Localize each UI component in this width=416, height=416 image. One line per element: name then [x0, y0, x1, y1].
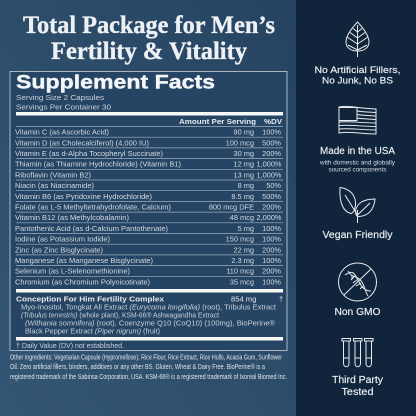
icon: test tubes [342, 338, 373, 367]
nutrient rows: Niacin (as Niacinamide) [15, 181, 94, 190]
table heading: Supplement Facts [16, 72, 215, 94]
nutrient rows: 200% [262, 267, 281, 276]
text: made in the usa: with domestic and globally [319, 160, 396, 166]
nutrient rows [15, 128, 282, 286]
icon: vegan plant [340, 188, 375, 223]
fertility complex ingredients: Myo-Inositol, Tongkat Ali Extract (Eurycoma longifolia) (root), Tribulus Extract [21, 302, 276, 312]
nutrient rows: 200% [262, 245, 281, 254]
fertility complex ingredients: Black Pepper Extract (Piper nigrum) (fruit) [25, 326, 160, 336]
nutrient rows: 100% [262, 128, 281, 137]
fertility complex heading: † [279, 294, 283, 304]
nutrient rows: 2,000% [256, 213, 282, 222]
title: Fertility & Vitality [51, 38, 247, 65]
nutrient rows: 22 mg [233, 245, 254, 254]
serving information: Servings Per Container 30 [16, 102, 111, 112]
nutrient rows: 500% [262, 138, 281, 147]
nutrient rows: 30 mg [233, 149, 254, 158]
nutrient rows: 100 mcg [226, 138, 254, 147]
nutrient rows: 8 mg [238, 181, 254, 190]
nutrient rows: Vitamin C (as Ascorbic Acid) [15, 128, 109, 137]
icon: non gmo dna [338, 263, 376, 301]
nutrient rows: Iodine (as Potassium Iodide) [15, 235, 110, 244]
bottom heavy rule [16, 337, 283, 340]
nutrient rows: 500% [262, 192, 281, 201]
title: Total Package for Men’s [23, 12, 275, 39]
nutrient rows: 5 mg [238, 224, 254, 233]
other ingredients text [10, 352, 287, 381]
top heavy rule [16, 112, 283, 116]
column headers: %DV [264, 117, 283, 126]
title [23, 12, 275, 65]
text: vegan friendly: Vegan Friendly [322, 230, 393, 241]
nutrient rows: Thiamin (as Thiamine Hydrochloride) (Vitamin B1) [15, 160, 181, 169]
table border [10, 72, 287, 350]
nutrient rows: Pantothenic Acid (as d-Calcium Pantothenate) [15, 224, 168, 233]
icon: american flag [339, 106, 376, 134]
panel: left background [0, 0, 297, 416]
serving information [16, 93, 111, 112]
nutrient rows: Riboflavin (Vitamin B2) [15, 170, 91, 179]
nutrient rows: Vitamin B12 (as Methylcobalamin) [15, 213, 129, 222]
other ingredients text: Other Ingredients: Vegetarian Capsule (Hypromellose), Rice Flour, Rice Extract, Rice Hulls, Acacia Gum, Sunflower [10, 352, 282, 362]
nutrient rows: 100% [262, 277, 281, 286]
text: no artificial fillers [314, 65, 400, 86]
fertility complex ingredients: (Withania somnifera) (root), Coenzyme Q10 (CoQ10) (100mg), BioPerine® [25, 318, 276, 328]
nutrient rows: Chromium (as Chromium Polynicotinate) [15, 277, 150, 286]
other ingredients text: registered trademark of the Sabinsa Corporation, USA. KSM-66® is a registered trademark of Ixoreal Biomed Inc. [10, 372, 287, 381]
nutrient rows: 1,000% [256, 170, 282, 179]
nutrient rows: Zinc (as Zinc Bisglycinate) [15, 245, 103, 254]
text: made in the usa [319, 146, 396, 174]
icon: leaf [346, 22, 369, 57]
nutrient rows: 12 mg [233, 160, 254, 169]
nutrient rows: 13 mg [233, 170, 254, 179]
nutrient rows: Selenium (as L-Selenomethionine) [15, 267, 130, 276]
nutrient rows: 150 mcg [226, 235, 254, 244]
serving information: Serving Size 2 Capsules [16, 93, 104, 102]
fertility complex ingredients: (Tribulus terrestris) (whole plant), KSM-66® Ashwagandha Extract [21, 310, 219, 320]
fertility complex heading [16, 294, 283, 304]
fertility complex heading: 854 mg [231, 294, 256, 304]
text: third party tested: Third Party [332, 375, 383, 386]
fertility complex heading: Conception For Him Fertility Complex [16, 294, 165, 304]
text: no artificial fillers: No Junk, No BS [322, 76, 393, 86]
nutrient rows: 100% [262, 235, 281, 244]
daily value footnote: † Daily Value (DV) not established. [16, 341, 124, 350]
nutrient rows: 8.5 mg [231, 192, 254, 201]
fertility complex ingredients [21, 302, 276, 336]
nutrient rows: Vitamin E (as d-Alpha Tocopheryl Succinate) [15, 149, 163, 158]
nutrient rows: 200% [262, 149, 281, 158]
nutrient rows: 35 mcg [230, 277, 254, 286]
nutrient rows: 1,000% [256, 160, 282, 169]
panel: supplement facts [10, 72, 287, 350]
row dividers [16, 126, 283, 276]
nutrient rows: 50% [266, 181, 281, 190]
nutrient rows: 200% [262, 202, 281, 212]
text: third party tested [332, 375, 383, 398]
nutrient rows: 2.3 mg [231, 256, 254, 265]
text: made in the usa: Made in the USA [320, 146, 395, 157]
nutrient rows: Vitamin B6 (as Pyridoxine Hydrochloride) [15, 192, 152, 201]
text: third party tested: Tested [342, 387, 374, 398]
nutrient rows: 90 mg [233, 128, 254, 137]
nutrient rows: 110 mcg [226, 267, 254, 276]
nutrient rows: 800 mcg DFE [209, 202, 254, 212]
nutrient rows: 100% [262, 256, 281, 265]
nutrient rows: Folate (as L-5 Methyltetrahydrofolate, Calcium) [15, 202, 171, 212]
panel: right background [288, 0, 416, 416]
text: no artificial fillers: No Artificial Fillers, [314, 65, 400, 76]
nutrient rows: Manganese (as Manganese Bisglycinate) [15, 256, 153, 265]
middle heavy rule [16, 289, 283, 292]
other ingredients text: Oil. Zero artificial fillers, binders, additives or any other BS. Gluten, Wheat & Dairy Free. BioPerine® is a [10, 362, 266, 371]
nutrient rows: 100% [262, 224, 281, 233]
nutrient rows: 48 mcg [230, 213, 254, 222]
column headers: Amount Per Serving [179, 117, 256, 126]
nutrient rows: Vitamin D (as Cholecalciferol) (4,000 IU) [15, 138, 149, 147]
text: non gmo: Non GMO [334, 307, 381, 318]
text: made in the usa: sourced components [328, 166, 387, 174]
